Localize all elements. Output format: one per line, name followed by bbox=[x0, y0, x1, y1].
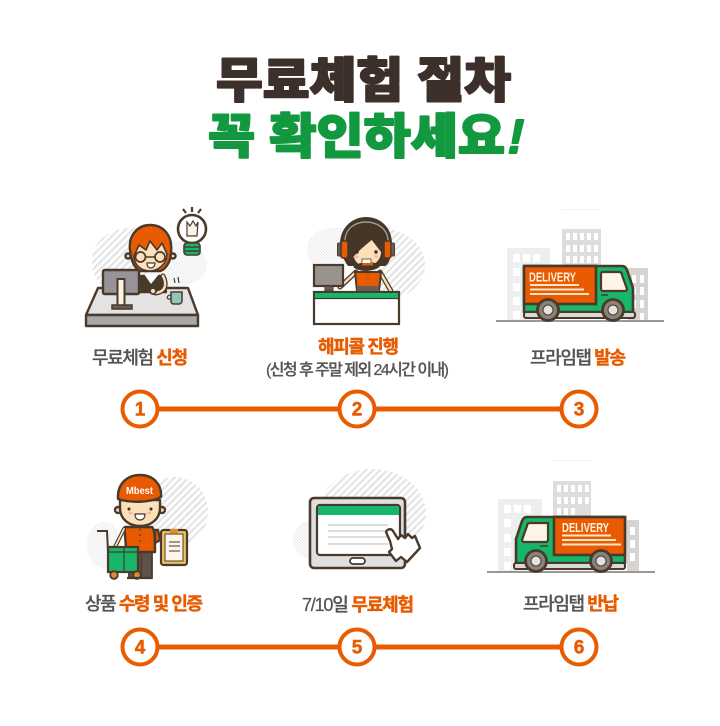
label: step 2 heading: 해피콜 진행 bbox=[318, 337, 399, 357]
label: step 3: 프라임탭 발송 bbox=[530, 348, 626, 368]
icon: step 3 delivery truck facing right bbox=[496, 210, 664, 321]
label: step 4: 상품 수령 및 인증 bbox=[85, 594, 203, 614]
title: line 2: ! bbox=[503, 110, 530, 164]
timeline: steps 4 to 6 bbox=[122, 630, 596, 664]
timeline: steps 4 to 6: 4 bbox=[135, 638, 146, 658]
icon: step 6 delivery truck facing left: DELIVERY bbox=[562, 521, 609, 535]
icon: step 5 tablet with pointing hand bbox=[293, 469, 426, 568]
label: step 5: 7/10일 무료체험 bbox=[302, 595, 414, 615]
timeline: steps 1 to 3: 2 bbox=[352, 400, 362, 420]
icon: step 2 call agent with headset bbox=[307, 217, 425, 324]
icon: step 6 delivery truck facing left bbox=[487, 460, 655, 572]
timeline: steps 1 to 3: 1 bbox=[135, 400, 146, 420]
icon: step 3 delivery truck facing right: DELIVERY bbox=[529, 270, 576, 284]
label: step 6: 프라임탭 반납 bbox=[523, 594, 619, 614]
timeline: steps 4 to 6: 6 bbox=[574, 638, 584, 658]
icon: step 4 delivery man with cart and clipboard bbox=[87, 475, 208, 579]
timeline: steps 1 to 3: 3 bbox=[574, 400, 584, 420]
timeline: steps 4 to 6: 5 bbox=[352, 638, 363, 658]
timeline: steps 1 to 3 bbox=[122, 392, 596, 426]
label: step 2 note: (신청 후 주말 제외 24시간 이내) bbox=[266, 361, 449, 379]
icon: step 1 office worker at desk with light bulb bbox=[86, 207, 207, 326]
label: step 1: 무료체험 신청 bbox=[92, 348, 188, 368]
title: line 2: 꼭 확인하세요 bbox=[208, 111, 505, 164]
title: line 1: 무료체험 절차 bbox=[216, 55, 511, 108]
icon: step 4 delivery man with cart and clipboard: Mbest bbox=[126, 485, 153, 497]
